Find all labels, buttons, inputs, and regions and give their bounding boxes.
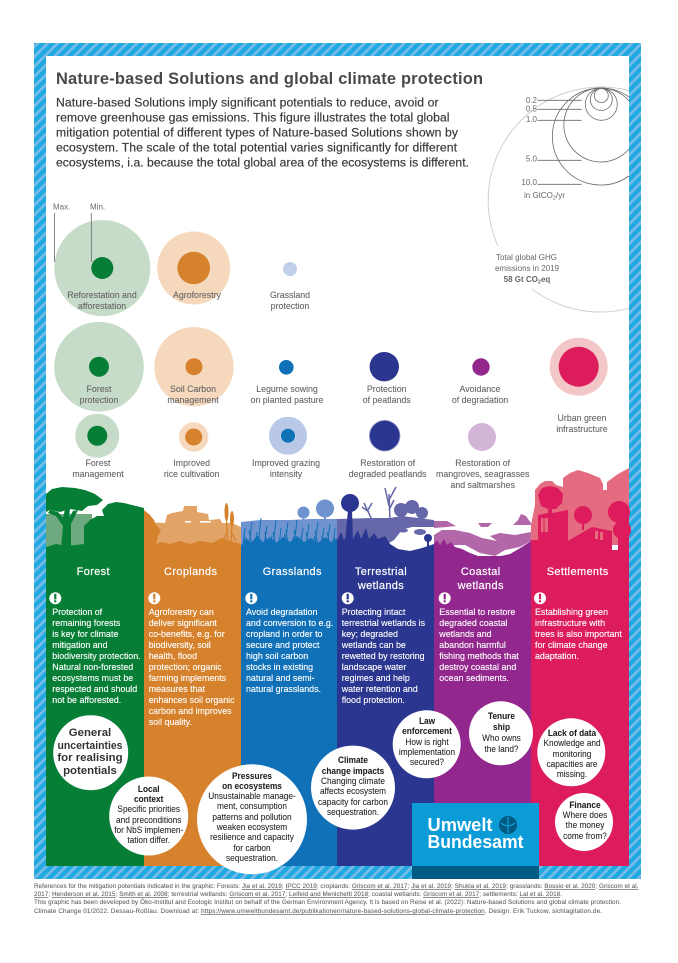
bubble: climate change impacts: capacity for carbon <box>318 797 388 807</box>
settlements text: trees is also important <box>535 629 622 639</box>
bubble: climate change impacts <box>311 746 395 830</box>
bubble: law enforcement: enforcement <box>402 726 452 736</box>
circle: agroforestry: Agroforestry <box>173 290 222 300</box>
bubble: climate change impacts: sequestration. <box>327 807 379 817</box>
title: Nature-based Solutions and global climate protection <box>56 70 483 88</box>
coastal text: destroy coastal and <box>439 662 516 672</box>
circle: forest management: Forest <box>86 458 111 468</box>
circle: avoidance of degradation: Avoidance <box>460 384 501 394</box>
coastal landscape <box>434 514 531 562</box>
max and min key <box>53 202 105 212</box>
bubble: pressures on ecosystems: patterns and pollution <box>212 812 292 822</box>
size legend: global emissions and scale circles: emissions in 2019 <box>495 264 560 273</box>
bubble: local context: Local <box>138 784 160 794</box>
circle: reforestation and afforestation <box>54 213 150 316</box>
grasslands text: natural grasslands. <box>246 684 321 694</box>
croplands text: biodiversity, soil <box>149 640 211 650</box>
logo: Umweltbundesamt: Umwelt <box>428 814 492 835</box>
bubble: local context: Specific priorities <box>117 804 181 814</box>
size legend: global emissions and scale circles: Total global GHG <box>496 253 557 262</box>
forest text: Natural non-forested <box>52 662 133 672</box>
coastal text: Essential to restore <box>439 607 515 617</box>
circle: urban green infrastructure <box>550 338 608 434</box>
circle: reforestation and afforestation: Reforestation and <box>67 290 137 300</box>
panel: grasslands <box>241 500 337 866</box>
forest landscape <box>46 487 144 552</box>
grasslands text: high soil carbon <box>246 651 308 661</box>
bubble: pressures on ecosystems: on ecosystems <box>222 781 282 791</box>
panel: terrestrial wetlands: wetlands <box>357 580 404 592</box>
icon: exclamation <box>342 592 354 604</box>
circle: grassland protection: Grassland <box>270 290 310 300</box>
grasslands text: Avoid degradation <box>246 607 317 617</box>
croplands landscape <box>144 503 241 547</box>
size legend: global emissions and scale circles: 2 <box>553 196 556 202</box>
wetlands landscape <box>337 487 434 556</box>
icon: exclamation <box>534 592 546 604</box>
wetlands text: wetlands can be <box>341 640 406 650</box>
circle: forest management: management <box>72 469 124 479</box>
wetlands text: regimes and help <box>342 673 410 683</box>
size legend: global emissions and scale circles: 58 Gt CO <box>504 275 538 284</box>
size legend: global emissions and scale circles: 0.5 <box>526 104 538 114</box>
settlements text <box>535 607 622 661</box>
wetlands text <box>341 607 426 705</box>
circle: soil carbon management: management <box>167 395 219 405</box>
bubble: climate change impacts: affects ecosystem <box>320 786 386 796</box>
bubble: lack of data: Lack of data <box>548 728 596 738</box>
size legend: global emissions and scale circles: 10.0 <box>521 178 538 187</box>
forest text: is key for climate <box>52 629 118 639</box>
coastal text: fishing methods that <box>439 651 519 661</box>
size legend: global emissions and scale circles: 2 <box>538 280 541 286</box>
circle: agroforestry <box>157 232 230 304</box>
croplands text <box>149 607 235 727</box>
bubble: general uncertainties: General <box>69 727 111 739</box>
circle: forest management <box>72 414 124 479</box>
circle: protection of peatlands <box>363 352 411 405</box>
circle: legume sowing: Legume sowing <box>256 384 318 394</box>
bubble: finance: come from? <box>563 831 607 841</box>
references footer: This graphic has been developed by Öko-Institut and Ecologic Institut on behalf of the German Environment Agency. It is based on Reise et al. (2022): Nature-based Solutions and global climate protection. <box>34 898 621 906</box>
references footer: 2017; Henderson et al. 2015; Smith et al. 2008; terrestrial wetlands: Griscom et al. 2017; Leifeld and Menichetti 2018; coastal wetlands: Griscom et al. 2017; settlements: Lal et al. 2018. <box>34 891 562 898</box>
bubble: local context: for NbS implemen- <box>114 825 183 835</box>
wetlands text: landscape water <box>342 662 406 672</box>
intro text block <box>56 96 469 170</box>
size legend: global emissions and scale circles: /yr <box>556 191 565 200</box>
bubble: lack of data: Knowledge and <box>543 738 601 748</box>
croplands text: Agroforestry can <box>149 607 214 617</box>
croplands text: protection; organic <box>149 662 222 672</box>
bubble: climate change impacts: change impacts <box>322 766 384 776</box>
icon: exclamation <box>439 592 451 604</box>
circle: forest protection <box>54 322 144 412</box>
bubble: finance: Finance <box>569 800 601 810</box>
croplands text: measures that <box>149 684 205 694</box>
circle: restoration of mangroves: mangroves, seagrasses <box>436 469 530 479</box>
forest text: respected and should <box>52 684 137 694</box>
circle: legume sowing: on planted pasture <box>251 395 324 405</box>
bubble: finance: the money <box>566 820 605 830</box>
coastal text: wetlands and <box>438 629 492 639</box>
wetlands text: key; degraded <box>342 629 398 639</box>
circle: forest protection: Forest <box>87 384 112 394</box>
intro text block: ecosystem. The scale of the total potential varies significantly for different <box>56 140 458 154</box>
bubble: lack of data <box>537 718 605 786</box>
bubble: lack of data: missing. <box>557 769 587 779</box>
circle: reforestation and afforestation: afforestation <box>78 301 126 311</box>
bubble: law enforcement: Law <box>419 716 435 726</box>
icon: exclamation <box>148 592 160 604</box>
panel: forest: Forest <box>77 566 110 578</box>
size legend: global emissions and scale circles: eq <box>541 275 550 284</box>
panel: settlements <box>531 468 631 866</box>
max and min key: Max. <box>53 202 70 212</box>
wetlands text: flood protection. <box>342 695 405 705</box>
bubble: finance: Where does <box>563 810 608 820</box>
bubble: pressures on ecosystems: Unsustainable manage- <box>208 791 296 801</box>
forest text: remaining forests <box>52 618 121 628</box>
size legend: global emissions and scale circles <box>488 87 629 312</box>
intro text block: mitigation potential of different types of Nature-based Solutions shown by <box>56 126 459 140</box>
wetlands text: rewetted by restoring <box>342 651 425 661</box>
bubble: finance <box>555 793 613 851</box>
grasslands text: and conversion to e.g. <box>246 618 333 628</box>
grasslands landscape <box>241 500 337 548</box>
circle: grassland protection: protection <box>271 301 309 311</box>
forest text: not be afforested. <box>52 695 121 705</box>
coastal text <box>438 607 519 683</box>
circle: restoration of mangroves: Restoration of <box>455 458 511 468</box>
settlements text: Establishing green <box>535 607 608 617</box>
grasslands text: stocks in existing <box>246 662 313 672</box>
striped frame <box>34 43 641 879</box>
bubble: general uncertainties: potentials <box>63 765 117 777</box>
forest text: mitigation and <box>52 640 108 650</box>
grasslands text: natural and semi- <box>246 673 315 683</box>
circle: restoration of mangroves <box>436 423 530 490</box>
references footer <box>34 883 639 915</box>
bubble: law enforcement: secured? <box>410 757 444 767</box>
forest text: biodiversity protection. <box>52 651 141 661</box>
references footer: Climate Change 01/2022. Dessau-Roßlau. Download at: https://www.umweltbundesamt.de/publikationen/nature-based-solutions-global-climate-protection. Design: Erik Tuckow, sichtagitation.de. <box>34 908 602 915</box>
bubble: local context: and preconditions <box>116 815 182 825</box>
bubble: law enforcement: How is right <box>405 737 449 747</box>
settlements text: adaptation. <box>535 651 579 661</box>
settlements text: infrastructure with <box>535 618 605 628</box>
max and min key: Min. <box>90 202 105 212</box>
bubble: pressures on ecosystems <box>197 764 307 874</box>
circle: restoration of mangroves: and saltmarshes <box>450 480 516 490</box>
coastal text: degraded coastal <box>439 618 507 628</box>
circle: avoidance of degradation <box>452 358 508 405</box>
icon: exclamation <box>49 592 61 604</box>
grasslands text: secure and protect <box>246 640 320 650</box>
panel: settlements: Settlements <box>547 566 609 578</box>
circle: improved rice cultivation: rice cultivation <box>164 469 220 479</box>
bubble: general uncertainties: uncertainties <box>58 740 122 752</box>
croplands text: soil quality. <box>149 717 192 727</box>
bubble: pressures on ecosystems: Pressures <box>232 771 272 781</box>
bubble: local context: context <box>134 794 163 804</box>
bubble: local context <box>109 776 188 856</box>
wetlands text: Protecting intact <box>342 607 406 617</box>
bubble: tenure ship: ship <box>493 722 510 732</box>
circle: improved rice cultivation: Improved <box>173 458 210 468</box>
icon: exclamation <box>245 592 257 604</box>
bubble: law enforcement: implementation <box>399 747 455 757</box>
bubble: tenure ship: Tenure <box>488 711 515 721</box>
size legend: global emissions and scale circles: 5.0 <box>526 154 538 164</box>
bubble: law enforcement <box>393 710 461 778</box>
croplands text: farming implements <box>149 673 227 683</box>
circle: improved grazing intensity: Improved grazing <box>252 458 320 468</box>
circle: protection of peatlands: of peatlands <box>363 395 411 405</box>
forest text: ecosystems must be <box>52 673 133 683</box>
size legend: global emissions and scale circles: in GtCO <box>524 191 553 200</box>
circle: forest protection: protection <box>80 395 118 405</box>
bubble: pressures on ecosystems: ment, consumption <box>217 801 287 811</box>
bubble: climate change impacts: Changing climate <box>321 776 385 786</box>
forest text: Protection of <box>52 607 103 617</box>
bubble: local context: tation differ. <box>127 835 170 845</box>
settlements text: for climate change <box>535 640 608 650</box>
panel: terrestrial wetlands <box>337 487 434 866</box>
intro text block: Nature-based Solutions imply significant potentials to reduce, avoid or <box>56 96 438 110</box>
coastal text: abandon harmful <box>439 640 506 650</box>
circle: restoration of degraded peatlands: degraded peatlands <box>349 469 427 479</box>
bubble: lack of data: capacities are <box>546 759 598 769</box>
panel: terrestrial wetlands: Terrestrial <box>355 566 407 578</box>
wetlands text: terrestrial wetlands is <box>342 618 426 628</box>
circle: protection of peatlands: Protection <box>367 384 407 394</box>
circle: grassland protection <box>270 262 310 311</box>
intro text block: ecosystems, i.a. because the total global area of the ecosystems is different. <box>56 156 469 170</box>
circle: legume sowing <box>251 360 324 405</box>
circle: restoration of degraded peatlands <box>349 420 427 479</box>
circle: improved grazing intensity: intensity <box>270 469 303 479</box>
intro text block: remove greenhouse gas emissions. This figure illustrates the total global <box>56 110 450 124</box>
logo: Umweltbundesamt: Bundesamt <box>428 831 524 852</box>
circle: improved rice cultivation <box>164 422 220 479</box>
bubble: pressures on ecosystems: weaken ecosystem <box>216 822 287 832</box>
wetlands text: water retention and <box>341 684 418 694</box>
grasslands text <box>246 607 333 694</box>
references footer: References for the mitigation potentials indicated in the graphic: Forests: Jia et al. 2019; IPCC 2019; croplands: Griscom et al. 2017; Jia et al. 2019; Shukla et al. 2019; grasslands: Bossio et al. 2020; Griscom et al. <box>34 883 639 890</box>
croplands text: co-benefits, e.g. for <box>149 629 225 639</box>
bubble: tenure ship: the land? <box>484 744 519 754</box>
croplands text: enhances soil organic <box>149 695 235 705</box>
circle: soil carbon management <box>154 327 234 406</box>
bubble: pressures on ecosystems: resilience and capacity <box>210 832 294 842</box>
bubble: climate change impacts: Climate <box>338 755 368 765</box>
circle: soil carbon management: Soil Carbon <box>170 384 216 394</box>
panel: croplands <box>144 503 241 866</box>
circle: improved grazing intensity <box>252 417 320 479</box>
size legend: global emissions and scale circles: 1.0 <box>526 115 538 124</box>
size legend: global emissions and scale circles: 0.2 <box>526 96 538 105</box>
bubble: lack of data: monitoring <box>553 749 591 759</box>
settlements landscape <box>531 468 631 552</box>
panel: coastal wetlands: Coastal <box>461 566 501 578</box>
forest text <box>52 607 141 705</box>
bubble: pressures on ecosystems: for carbon <box>233 843 271 853</box>
panel: grasslands: Grasslands <box>263 566 322 578</box>
bubble: tenure ship <box>469 701 533 765</box>
circle: urban green infrastructure: infrastructure <box>556 424 608 434</box>
coastal text: ocean sediments. <box>439 673 509 683</box>
circle: restoration of degraded peatlands: Restoration of <box>360 458 416 468</box>
panel: coastal wetlands: wetlands <box>457 580 504 592</box>
panel: croplands: Croplands <box>164 566 217 578</box>
bubble: general uncertainties <box>53 715 128 790</box>
circle: avoidance of degradation: of degradation <box>452 395 508 405</box>
logo: Umweltbundesamt <box>412 803 539 879</box>
grasslands text: cropland in order to <box>246 629 323 639</box>
bubble: tenure ship: Who owns <box>482 733 521 743</box>
croplands text: health, flood <box>149 651 197 661</box>
croplands text: carbon and improves <box>149 706 232 716</box>
croplands text: deliver significant <box>149 618 217 628</box>
circle: urban green infrastructure: Urban green <box>558 413 607 423</box>
bubble: pressures on ecosystems: sequestration. <box>226 853 278 863</box>
panel: coastal wetlands <box>434 514 531 866</box>
panel: forest <box>46 487 144 866</box>
bubble: general uncertainties: for realising <box>57 752 123 764</box>
